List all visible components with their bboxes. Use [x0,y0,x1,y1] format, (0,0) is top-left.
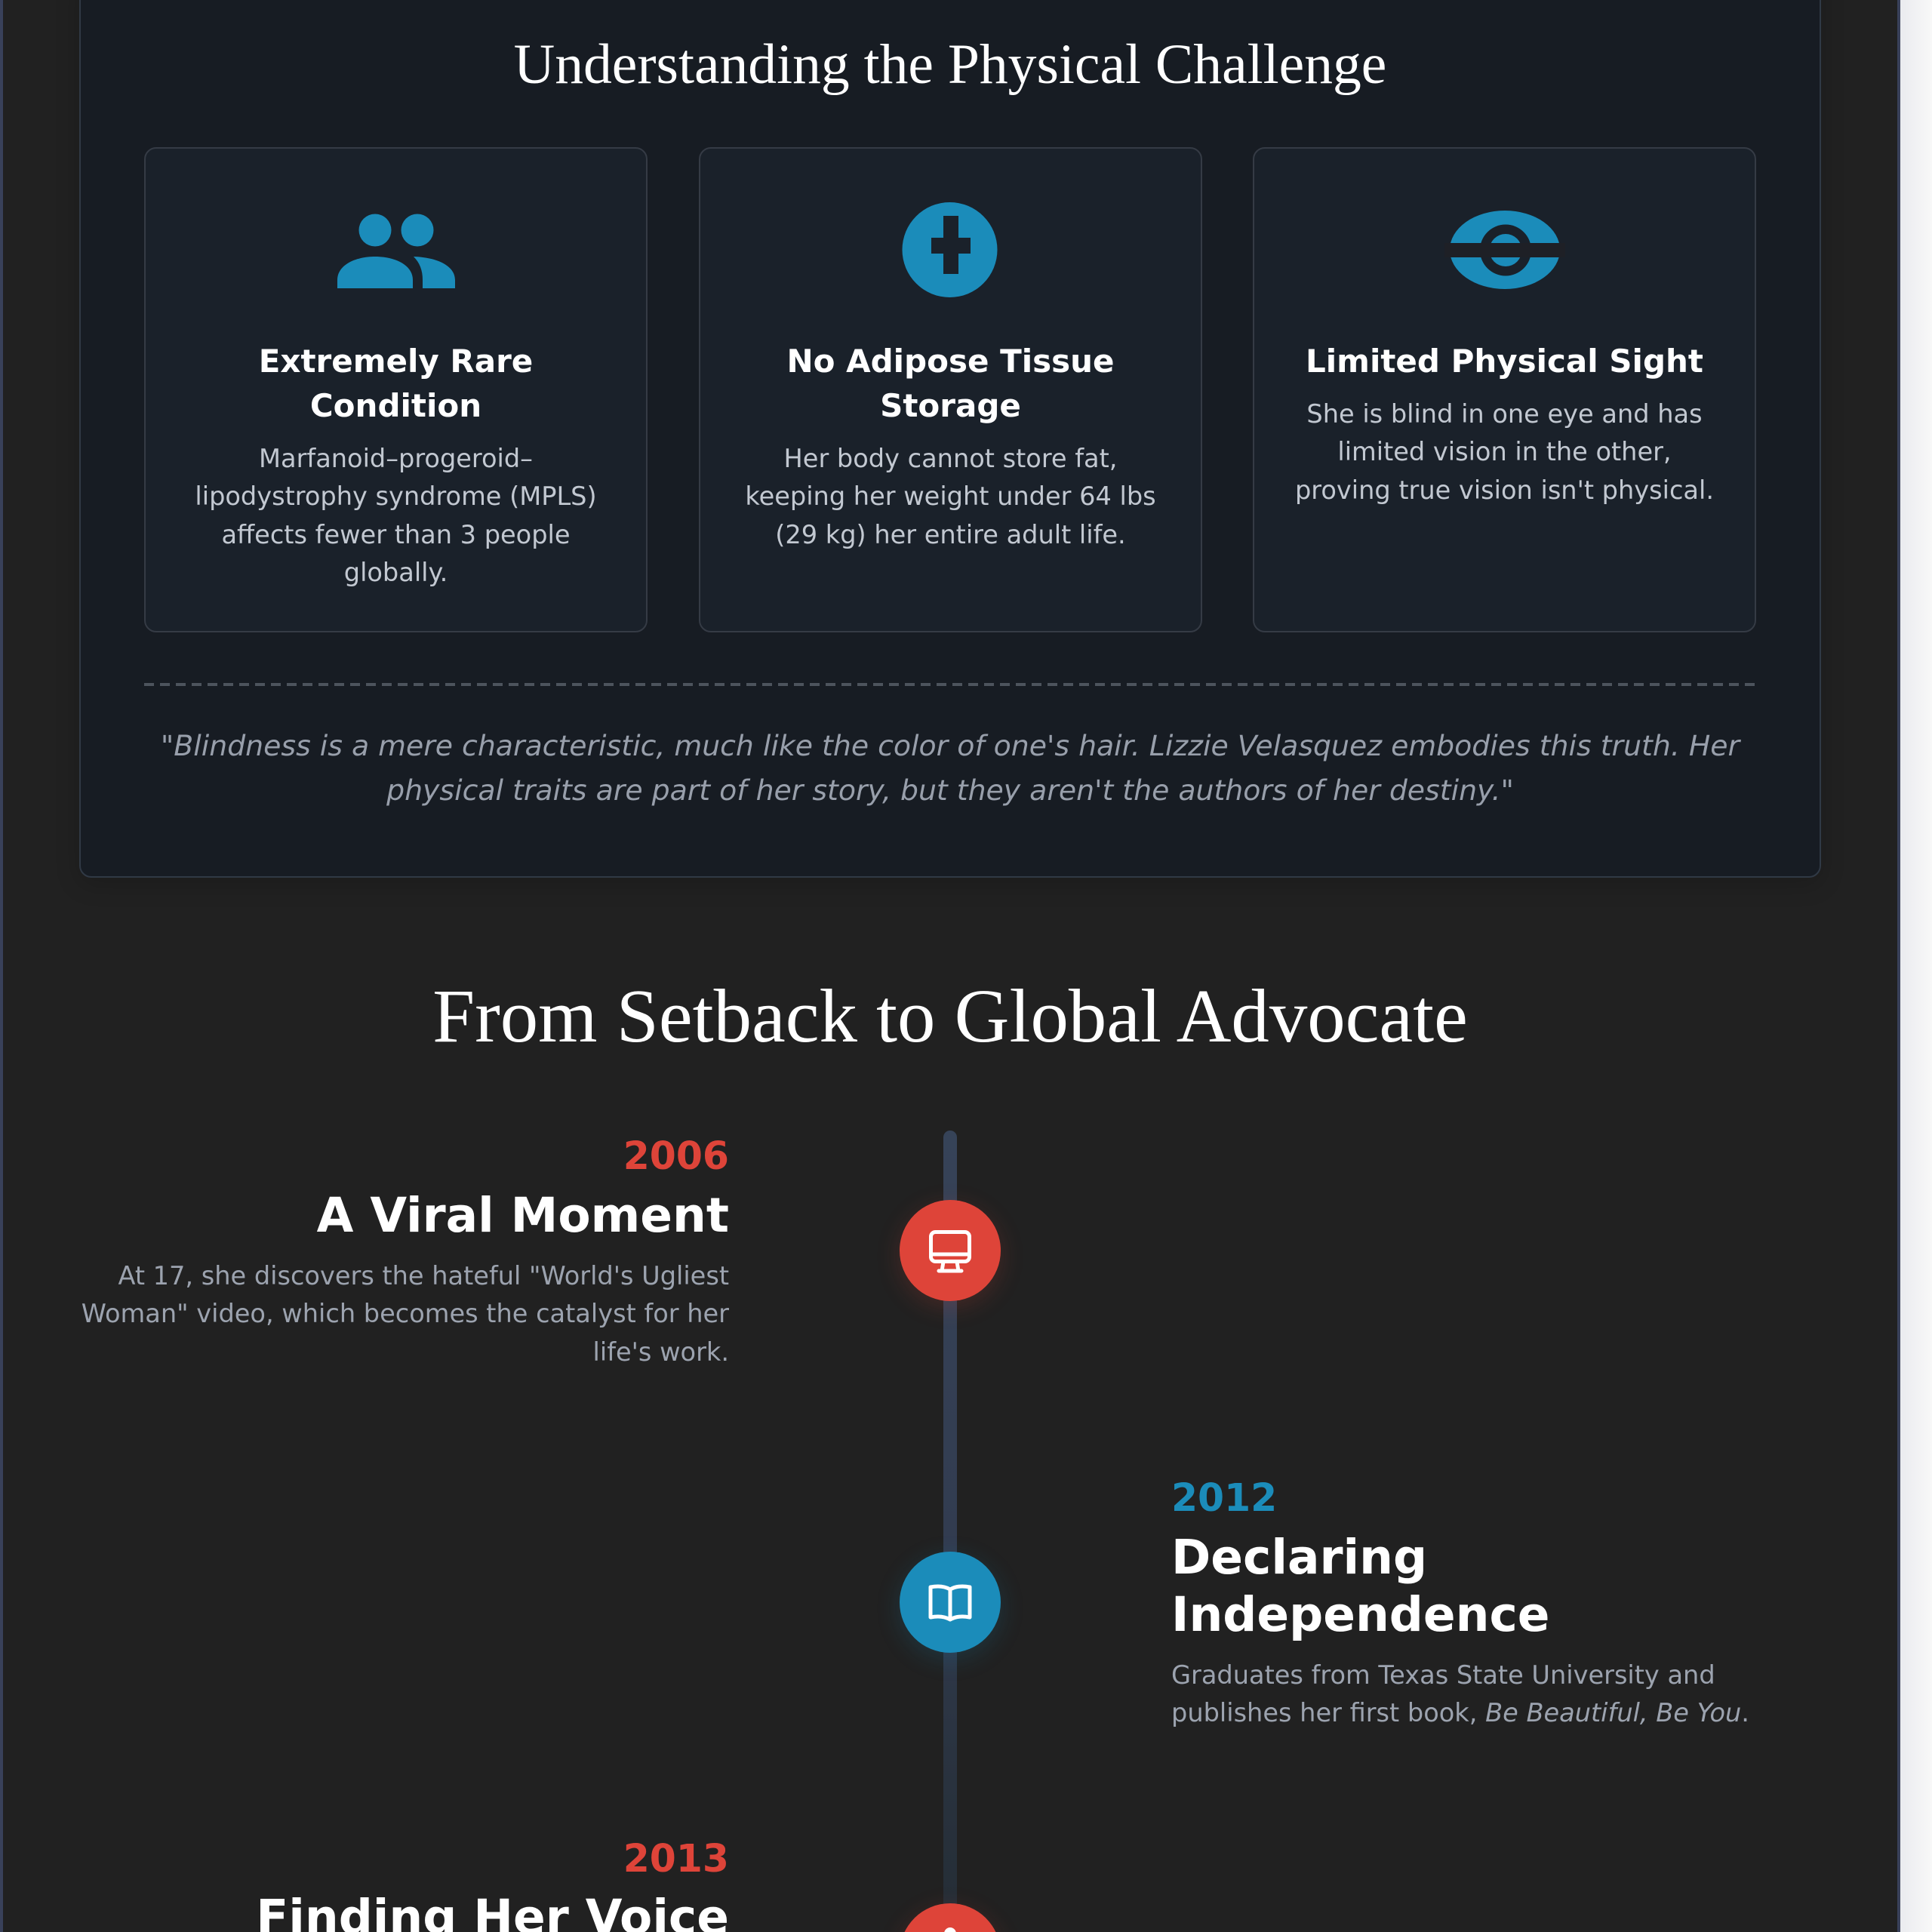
card: no adipose tissue storage [699,147,1202,632]
text: 2006: life's work. [593,1337,729,1367]
text: 2006 [82,1261,729,1367]
card text [1295,399,1714,505]
year 2013: 2013 [623,1836,729,1881]
card title [259,343,533,424]
card text [195,444,597,587]
text: 2012 [1171,1660,1749,1727]
icon: eye with bar [1451,211,1559,289]
title: declaring independence: Declaring [1171,1530,1427,1585]
card text: lipodystrophy syndrome (MPLS) [195,481,597,511]
card text [745,444,1156,549]
card title: Condition [310,387,481,424]
title: a viral moment: A Viral Moment [317,1188,729,1243]
marker: 2006 monitor [900,1200,1001,1301]
panel: understanding the physical challenge [79,0,1821,878]
card text: (29 kg) her entire adult life. [775,520,1126,549]
marker: 2013 [900,1903,1001,1932]
quote: "Blindness is a mere characteristic, much like the color of one's hair. Lizzie Velasquez embodies this truth. Her [161,729,1740,762]
year 2012: 2012 [1171,1475,1277,1520]
timeline event: 2013 [256,1836,1000,1932]
heading: from setback to global advocate: From Setback to Global Advocate [432,974,1468,1058]
title: declaring independence [1171,1530,1550,1642]
year 2006: 2006 [623,1134,729,1178]
text: 2012: publishes her first book, Be Beautiful, Be You. [1171,1698,1749,1727]
marker: 2012 book [900,1552,1001,1653]
right page edge [1897,0,1900,1932]
timeline event: 2006 [82,1134,1008,1367]
card text: Her body cannot store fat, [784,444,1117,473]
heading: understanding the physical challenge: Understanding the Physical Challenge [514,33,1386,96]
icon: medical cross [903,202,998,297]
icon: microphone top [944,1927,956,1932]
quote: physical traits are part of her story, but they aren't the authors of her destiny." [386,774,1514,807]
title: declaring independence: Independence [1171,1587,1550,1642]
card text: globally. [344,558,448,587]
card title: Limited Physical Sight [1306,343,1703,380]
icon: open book [928,1585,972,1621]
card: extremely rare condition [144,147,648,632]
text: 2006: At 17, she discovers the hateful "World's Ugliest [118,1261,729,1291]
card title [786,343,1115,424]
card text: keeping her weight under 64 lbs [745,481,1156,511]
text: 2012: Graduates from Texas State University and [1171,1660,1715,1689]
card text: limited vision in the other, [1337,437,1672,466]
timeline line [943,1131,957,1932]
card text: Marfanoid–progeroid– [259,444,533,473]
card text: affects fewer than 3 people [221,520,571,549]
card: limited physical sight [1253,147,1756,632]
icon: monitor [929,1230,971,1272]
card title: Extremely Rare [259,343,533,380]
dashed divider [144,683,1756,686]
card title: No Adipose Tissue [786,343,1115,380]
card text: She is blind in one eye and has [1306,399,1703,429]
icon: people [337,214,455,288]
left page edge [0,0,3,1932]
text: 2006: Woman" video, which becomes the catalyst for her [82,1299,729,1328]
card text: proving true vision isn't physical. [1295,475,1714,505]
timeline event: 2012 [894,1475,1749,1727]
quote [161,729,1741,807]
card title: Storage [880,387,1021,424]
